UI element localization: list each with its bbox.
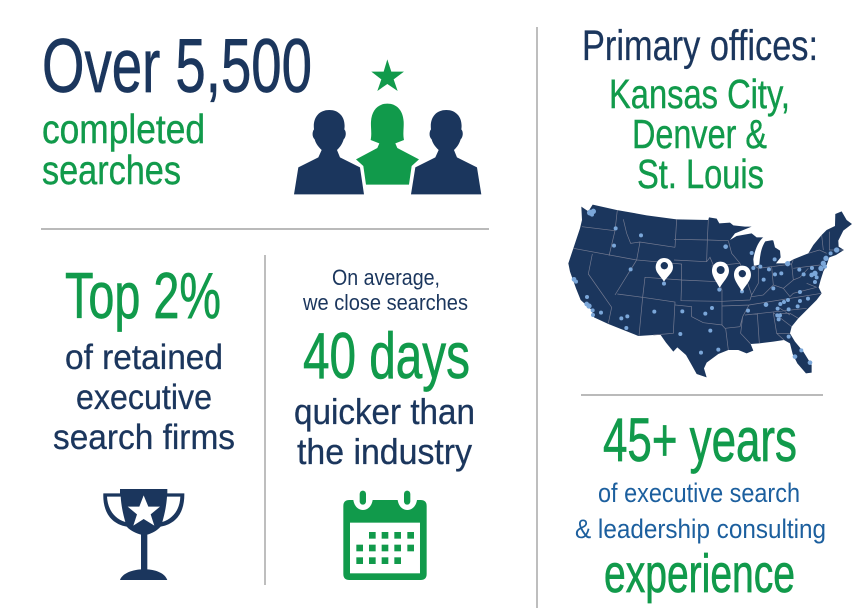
map: great lakes: [753, 237, 773, 266]
map: united states with office locations: [568, 205, 852, 377]
icon: star: [371, 59, 404, 91]
text: of retained executive search firms: executive: [76, 378, 212, 417]
text: quicker than the industry: [294, 391, 475, 472]
panel: completed searches: [42, 24, 481, 194]
icon: right person: [411, 110, 481, 194]
panel: 40 days: [294, 265, 475, 580]
icon: left person: [294, 110, 364, 194]
text: completed searches: completed: [42, 106, 205, 152]
icon: calendar: [343, 491, 427, 580]
panel: top 2%: [53, 259, 235, 580]
text: office cities: [609, 71, 790, 197]
text: office cities: Kansas City,: [609, 71, 790, 117]
text: completed searches: [42, 106, 205, 193]
text: of retained executive search firms: [53, 338, 235, 457]
map: land: [568, 205, 852, 377]
panel: primary offices: [568, 22, 852, 377]
text: on average, we close searches: [302, 265, 468, 315]
heading: 40 days: 40 days: [303, 319, 470, 392]
icon: trophy: [103, 489, 184, 580]
text: quicker than the industry: quicker than: [294, 391, 475, 432]
text: office cities: St. Louis: [637, 151, 764, 197]
text: completed searches: searches: [42, 147, 181, 193]
map: location dots: [572, 209, 839, 365]
text: of executive search and leadership consulting: & leadership consulting: [575, 514, 826, 544]
text: on average, we close searches: On average,: [332, 265, 440, 290]
text: of retained executive search firms: of retained: [65, 338, 223, 377]
map: office pins: [656, 258, 751, 291]
text: of executive search and leadership consulting: of executive search: [598, 478, 800, 508]
panel: 45+ years: [575, 406, 826, 604]
icon: centre person: [356, 104, 419, 185]
text: of executive search and leadership consulting: [575, 478, 826, 544]
text: of retained executive search firms: search firms: [53, 418, 235, 457]
text: on average, we close searches: we close searches: [302, 290, 468, 315]
text: office cities: Denver &: [632, 111, 767, 157]
heading: over 5,500: Over 5,500: [42, 24, 312, 109]
icon: three people with star: [294, 59, 481, 194]
heading: top 2%: Top 2%: [65, 259, 221, 332]
map: state borders: [573, 210, 843, 350]
text: quicker than the industry: the industry: [297, 431, 472, 472]
